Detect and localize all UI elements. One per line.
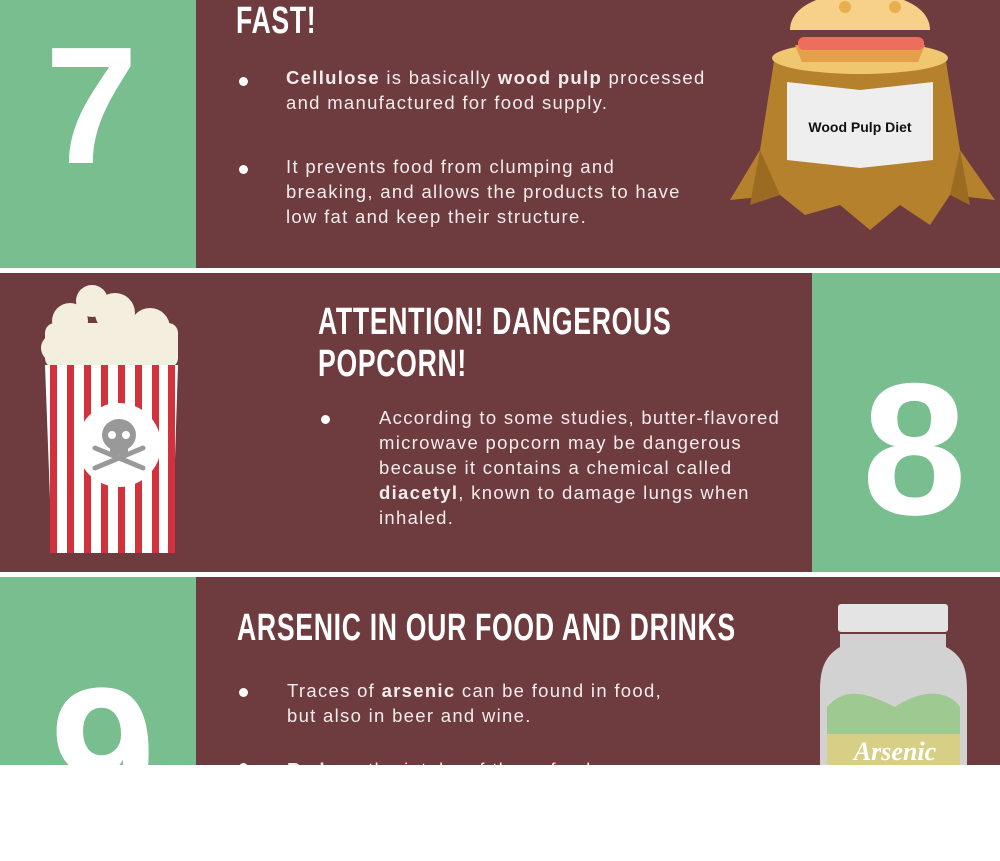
title: arsenic: ARSENIC IN OUR FOOD AND DRINKS [237,607,736,649]
title: dangerous popcorn: POPCORN! [318,343,467,385]
bullet: clumping: low fat and keep their structure. [286,206,587,227]
bullet: arsenic traces: Traces of arsenic can be found in food, [287,680,662,701]
bullet: diacetyl: because it contains a chemical called [379,457,733,478]
icon: stump with burger: Wood Pulp Diet [808,119,912,135]
bullet: arsenic traces [239,680,662,726]
icon: popcorn with skull [41,285,178,553]
bullet: diacetyl: inhaled. [379,507,454,528]
bullet: diacetyl [321,407,780,528]
bullet: cellulose: and manufactured for food supply. [286,92,608,113]
title: dangerous popcorn [318,301,671,385]
bullet: clumping [239,156,681,227]
bullet: clumping: breaking, and allows the products to have [286,181,681,202]
bullet: diacetyl: microwave popcorn may be dangerous [379,432,742,453]
icon: arsenic jar [820,604,967,765]
bullet: cellulose [239,67,706,113]
number 8: 8 [862,344,967,554]
bullet: cellulose: Cellulose is basically wood pulp processed [286,67,706,88]
bullet: clumping: It prevents food from clumping and [286,156,615,177]
bullet: diacetyl: According to some studies, butter-flavored [379,407,780,428]
icon: stump with burger [730,0,995,230]
panel: section 7 [0,0,1000,268]
number 9: 9 [50,649,156,861]
panel: section 8 [0,273,1000,572]
title: dangerous popcorn: ATTENTION! DANGEROUS [318,301,671,343]
title: fast: FAST! [236,0,316,42]
panel: section 9 [0,577,1000,861]
bullet: diacetyl: diacetyl, known to damage lungs when [379,482,750,503]
bullet: arsenic traces: but also in beer and wine. [287,705,532,726]
number 7: 7 [45,13,138,199]
